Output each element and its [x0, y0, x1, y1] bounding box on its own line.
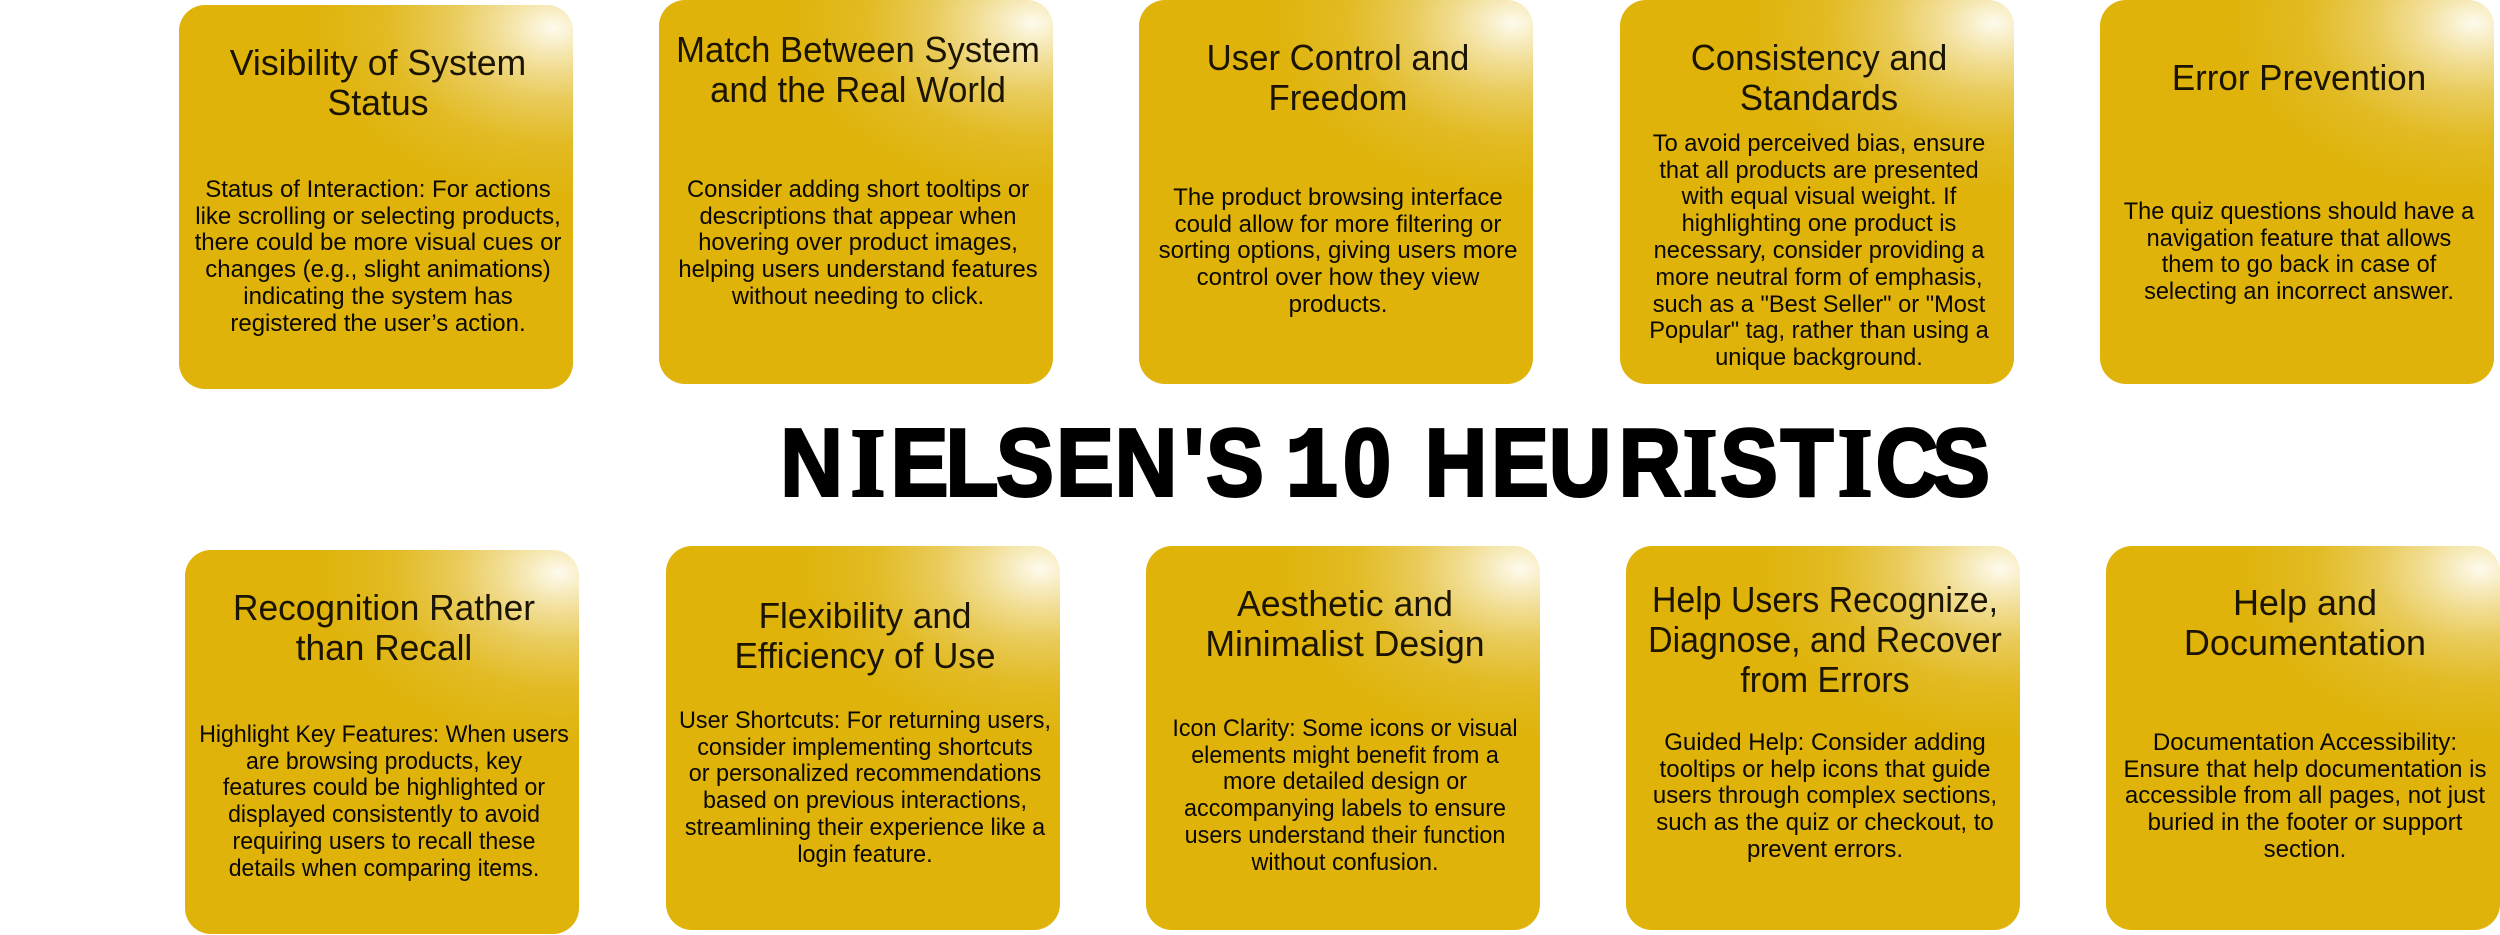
text: Consistency recommendation: [1649, 130, 1989, 371]
panel: Consistency and Standards: [1620, 0, 2014, 384]
text: Help and Documentation recommendation: Ensure that help documentation is: [2124, 756, 2486, 783]
text: Help and Documentation recommendation: buried in the footer or support: [2148, 809, 2462, 836]
text: Match Between System recommendation: descriptions that appear when: [699, 203, 1016, 230]
text: Flexibility recommendation: User Shortcuts: For returning users,: [679, 707, 1051, 734]
heading: Help Users Recognize, Diagnose, and Recover from Errors: Diagnose, and Recover: [1648, 618, 2002, 660]
text: Consistency recommendation: highlighting one product is: [1682, 210, 1956, 237]
heading: Recognition Rather than Recall: than Recall: [296, 626, 472, 668]
text: Recognition recommendation: Highlight Key Features: When users: [199, 721, 569, 748]
text: User Control recommendation: products.: [1289, 291, 1387, 318]
text: Aesthetic recommendation: more detailed design or: [1223, 768, 1467, 795]
heading: Help Users Recognize, Diagnose, and Recover from Errors: [1648, 578, 2002, 700]
text: User Control recommendation: The product browsing interface: [1173, 184, 1503, 211]
heading: Consistency and Standards: [1691, 36, 1947, 118]
text: Help Users recommendation: users through complex sections,: [1653, 782, 1997, 809]
text: Recognition recommendation: details when comparing items.: [229, 855, 539, 882]
heading: User Control and Freedom: [1207, 36, 1469, 118]
heading: Match Between System and the Real World: Match Between System: [676, 28, 1040, 70]
title: ST: [1720, 409, 1833, 517]
text: Error Prevention recommendation: navigation feature that allows: [2147, 225, 2451, 252]
heading: Aesthetic and Minimalist Design: Aesthetic and: [1237, 582, 1453, 624]
text: Help Users recommendation: tooltips or help icons that guide: [1660, 756, 1990, 783]
text: Aesthetic recommendation: Icon Clarity: Some icons or visual: [1172, 715, 1518, 742]
text: Visibility of System Status recommendation: indicating the system has: [243, 283, 513, 310]
text: Match Between System recommendation: hovering over product images,: [698, 229, 1018, 256]
text: Consistency recommendation: that all products are presented: [1659, 157, 1979, 184]
text: Visibility of System Status recommendation: there could be more visual cues or: [195, 229, 561, 256]
heading: Aesthetic and Minimalist Design: [1205, 582, 1485, 664]
text: Aesthetic recommendation: [1172, 715, 1518, 876]
heading: Visibility of System Status: [230, 42, 526, 122]
text: Flexibility recommendation: login feature.: [797, 841, 933, 868]
text: Help and Documentation recommendation: section.: [2264, 836, 2346, 863]
text: Help and Documentation recommendation: [2124, 729, 2486, 863]
text: Visibility of System Status recommendation: [195, 176, 561, 337]
heading: Aesthetic and Minimalist Design: Minimalist Design: [1205, 622, 1485, 664]
text: Help Users recommendation: [1653, 729, 1997, 863]
text: Visibility of System Status recommendation: registered the user’s action.: [230, 310, 526, 337]
heading: User Control and Freedom: User Control and: [1207, 36, 1469, 78]
text: Visibility of System Status recommendation: Status of Interaction: For actions: [205, 176, 551, 203]
heading: Recognition Rather than Recall: [233, 586, 535, 668]
text: User Control recommendation: could allow for more filtering or: [1175, 211, 1501, 238]
text: Flexibility recommendation: consider implementing shortcuts: [697, 734, 1033, 761]
panel: Error Prevention: [2100, 0, 2494, 384]
panel: Flexibility and Efficiency of Use: [666, 546, 1060, 930]
heading: Error Prevention: Error Prevention: [2172, 56, 2426, 98]
text: Recognition recommendation: features could be highlighted or: [223, 774, 545, 801]
title: ELSEN'S: [891, 409, 1286, 517]
panel: Recognition Rather than Recall: [185, 550, 579, 934]
heading: Match Between System and the Real World: [676, 28, 1040, 110]
text: Recognition recommendation: requiring users to recall these: [233, 828, 535, 855]
text: Aesthetic recommendation: users understand their function: [1185, 822, 1505, 849]
text: Aesthetic recommendation: without confusion.: [1252, 849, 1438, 876]
title: 1: [1285, 412, 1339, 526]
heading: Help and Documentation: [2184, 582, 2426, 662]
text: Flexibility recommendation: or personalized recommendations: [689, 760, 1041, 787]
heading: Match Between System and the Real World: and the Real World: [710, 68, 1006, 110]
text: Match Between System recommendation: [678, 176, 1038, 310]
text: Flexibility recommendation: streamlining their experience like a: [685, 814, 1045, 841]
text: User Control recommendation: control over how they view: [1197, 264, 1479, 291]
text: Consistency recommendation: To avoid perceived bias, ensure: [1653, 130, 1985, 157]
panel: User Control and Freedom: [1139, 0, 1533, 384]
text: User Control recommendation: sorting options, giving users more: [1159, 237, 1517, 264]
title: CS: [1876, 409, 1990, 517]
text: Help Users recommendation: such as the quiz or checkout, to: [1656, 809, 1994, 836]
text: Consistency recommendation: necessary, consider providing a: [1654, 237, 1984, 264]
title: N: [780, 409, 843, 517]
text: Recognition recommendation: [199, 721, 569, 882]
text: Error Prevention recommendation: selecting an incorrect answer.: [2144, 278, 2454, 305]
heading: Visibility of System Status: Status: [327, 82, 429, 122]
panel: Help Users Recognize, Diagnose, and Recover from Errors: [1626, 546, 2020, 930]
heading: Flexibility and Efficiency of Use: Flexibility and: [759, 594, 971, 636]
text: Match Between System recommendation: without needing to click.: [732, 283, 984, 310]
text: Consistency recommendation: unique background.: [1715, 344, 1923, 371]
text: Aesthetic recommendation: accompanying labels to ensure: [1184, 795, 1506, 822]
title: 0: [1343, 409, 1425, 517]
heading: Help Users Recognize, Diagnose, and Recover from Errors: from Errors: [1740, 658, 1910, 700]
text: Error Prevention recommendation: The quiz questions should have a: [2124, 198, 2474, 225]
heading: Consistency and Standards: Consistency and: [1691, 36, 1947, 78]
text: Help Users recommendation: prevent errors.: [1747, 836, 1903, 863]
heading: Recognition Rather than Recall: Recognition Rather: [233, 586, 535, 628]
text: Aesthetic recommendation: elements might benefit from a: [1191, 742, 1499, 769]
title: HEUR: [1425, 409, 1681, 517]
text: Match Between System recommendation: helping users understand features: [678, 256, 1038, 283]
heading: Flexibility and Efficiency of Use: [734, 594, 996, 676]
title: I: [1683, 409, 1717, 518]
title: [780, 409, 1990, 526]
text: Error Prevention recommendation: [2124, 198, 2474, 305]
text: Visibility of System Status recommendation: changes (e.g., slight animations): [205, 256, 551, 283]
panel: Help and Documentation: [2106, 546, 2500, 930]
heading: Help and Documentation: Help and: [2233, 582, 2377, 622]
title: I: [1838, 409, 1872, 518]
panel: Match Between System and the Real World: [659, 0, 1053, 384]
heading: Consistency and Standards: Standards: [1740, 76, 1898, 118]
text: Consistency recommendation: more neutral form of emphasis,: [1655, 264, 1983, 291]
title: I: [851, 409, 885, 518]
text: Help Users recommendation: Guided Help: Consider adding: [1664, 729, 1986, 756]
heading: Help Users Recognize, Diagnose, and Recover from Errors: Help Users Recognize,: [1652, 578, 1998, 620]
text: Error Prevention recommendation: them to go back in case of: [2162, 251, 2436, 278]
text: Flexibility recommendation: [679, 707, 1051, 868]
text: Recognition recommendation: displayed consistently to avoid: [228, 801, 540, 828]
text: User Control recommendation: [1159, 184, 1517, 318]
heading: Flexibility and Efficiency of Use: Efficiency of Use: [734, 634, 996, 676]
text: Consistency recommendation: with equal visual weight. If: [1682, 183, 1956, 210]
heading: Visibility of System Status: Visibility of System: [230, 42, 526, 82]
heading: User Control and Freedom: Freedom: [1268, 76, 1408, 118]
panel: Aesthetic and Minimalist Design: [1146, 546, 1540, 930]
text: Visibility of System Status recommendation: like scrolling or selecting products,: [195, 203, 561, 230]
text: Flexibility recommendation: based on previous interactions,: [703, 787, 1027, 814]
text: Match Between System recommendation: Consider adding short tooltips or: [687, 176, 1029, 203]
panel: Visibility of System Status: [179, 5, 573, 389]
text: Help and Documentation recommendation: accessible from all pages, not just: [2125, 782, 2485, 809]
heading: Help and Documentation: Documentation: [2184, 622, 2426, 662]
text: Consistency recommendation: such as a "Best Seller" or "Most: [1653, 291, 1985, 318]
text: Recognition recommendation: are browsing products, key: [246, 748, 522, 775]
text: Help and Documentation recommendation: Documentation Accessibility:: [2153, 729, 2457, 756]
text: Consistency recommendation: Popular" tag, rather than using a: [1649, 317, 1989, 344]
